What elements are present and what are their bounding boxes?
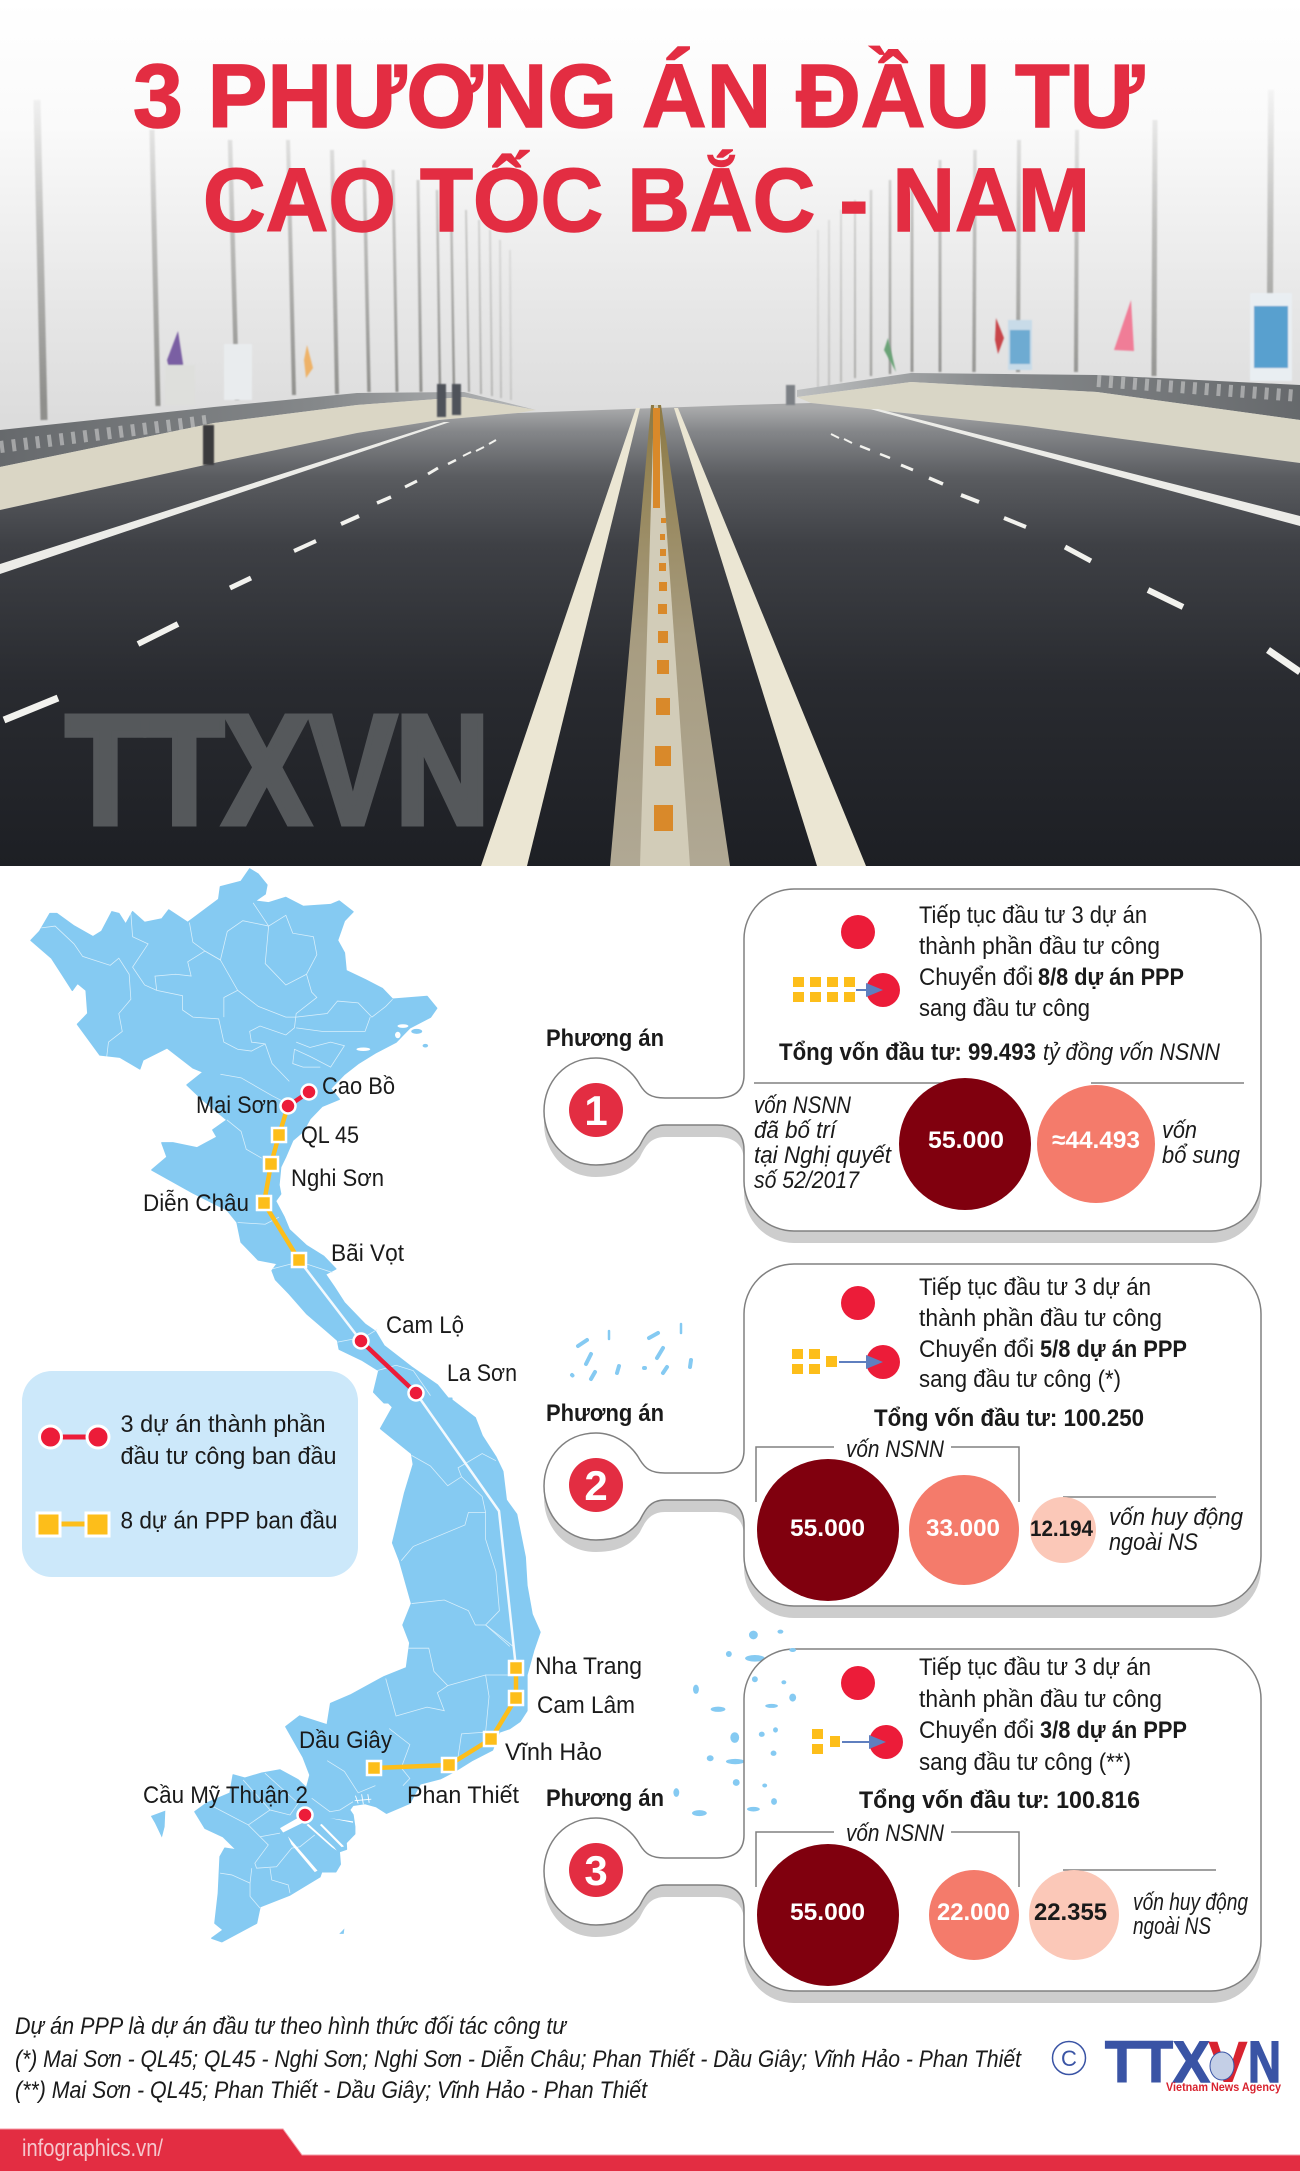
bubble: 44.493: ≈44.493 xyxy=(1052,1127,1140,1154)
map place labels: Vĩnh Hảo xyxy=(505,1739,602,1766)
note: allocated state budget: vốn NSNN xyxy=(754,1092,852,1119)
bubble: 55.000 xyxy=(757,1459,899,1601)
public investment project markers xyxy=(280,1084,424,1822)
heading: phương án 3: Phương án xyxy=(546,1785,664,1812)
bubble: 22.000: 22.000 xyxy=(937,1899,1010,1926)
logo: TTXVN: TTX xyxy=(1105,2030,1210,2095)
map place labels: Diễn Châu xyxy=(143,1190,249,1217)
footer url: infographics.vn/ xyxy=(22,2135,163,2162)
legend: PPP projects: 8 dự án PPP ban đầu xyxy=(120,1508,338,1534)
map place labels: La Sơn xyxy=(447,1360,517,1387)
footnotes xyxy=(15,2013,1022,2104)
map place labels: Cam Lộ xyxy=(386,1312,464,1339)
map place labels: Nha Trang xyxy=(535,1653,642,1680)
bubble: 22.355 xyxy=(1029,1870,1119,1960)
panel: phương án 3 xyxy=(544,1648,1261,2003)
title xyxy=(133,45,1144,251)
total investment: tỷ đồng vốn NSNN xyxy=(1043,1039,1221,1066)
panel: phương án 1 xyxy=(544,889,1261,1243)
bubble: 55.000: 55.000 xyxy=(790,1515,865,1542)
description text xyxy=(919,1274,1187,1393)
bracket: state budget xyxy=(756,1436,1019,1502)
bubble: 22.355: 22.355 xyxy=(1034,1899,1107,1926)
note: off-budget funds: vốn huy động xyxy=(1133,1889,1249,1916)
note: off-budget funds xyxy=(1133,1889,1249,1940)
icon: 5 PPP projects converted xyxy=(792,1345,900,1379)
bubble: 22.000 xyxy=(929,1870,1019,1960)
islands overlapping panel 3 xyxy=(747,1648,796,1811)
hero photo: foggy highway xyxy=(0,0,1300,866)
logo: TTXVN xyxy=(1105,2030,1281,2095)
bracket: state budget: vốn NSNN xyxy=(846,1436,945,1463)
heading: phương án 2: Phương án xyxy=(546,1400,664,1427)
islands: Hoàng Sa xyxy=(572,1324,691,1379)
note: allocated state budget xyxy=(754,1092,892,1194)
people and flags in the photo xyxy=(165,293,1292,465)
bubble: 12.194 xyxy=(1030,1497,1096,1563)
note: allocated state budget: số 52/2017 xyxy=(754,1167,860,1194)
bracket: state budget xyxy=(756,1820,1019,1887)
description text: Tiếp tục đầu tư 3 dự án xyxy=(919,902,1147,929)
copyright symbol: C xyxy=(1061,2046,1077,2071)
total investment: Tổng vốn đầu tư: 100.816 xyxy=(859,1787,1140,1814)
description text: Chuyển đổi xyxy=(919,1717,1034,1744)
note: additional funds: bổ sung xyxy=(1162,1142,1241,1169)
map place labels: Phan Thiết xyxy=(407,1782,519,1809)
description text: sang đầu tư công (**) xyxy=(919,1749,1131,1776)
map place labels: Dầu Giây xyxy=(299,1727,392,1754)
icon: 8 PPP projects converted xyxy=(793,973,900,1007)
map of Vietnam xyxy=(31,869,540,1942)
photo watermark TTXVN: TTXVN xyxy=(66,684,489,856)
copyright symbol xyxy=(1052,2042,1086,2074)
badge: number 3 xyxy=(569,1843,623,1897)
note: off-budget funds: ngoài NS xyxy=(1109,1529,1198,1556)
note: allocated state budget: đã bố trí xyxy=(754,1117,838,1144)
islands: Trường Sa xyxy=(673,1630,783,1816)
description text: 5/8 dự án PPP xyxy=(1040,1336,1187,1363)
badge: number 3: 3 xyxy=(584,1847,608,1894)
description text: 8/8 dự án PPP xyxy=(1038,964,1184,991)
description text: Chuyển đổi xyxy=(919,1336,1034,1363)
note: off-budget funds xyxy=(1109,1504,1244,1556)
bubble: 55.000 xyxy=(899,1078,1031,1210)
heading: phương án 1: Phương án xyxy=(546,1025,664,1052)
map place labels: Cầu Mỹ Thuận 2 xyxy=(143,1782,308,1809)
logo: TTXVN: Vietnam News Agency xyxy=(1166,2080,1281,2094)
bubble: 12.194: 12.194 xyxy=(1030,1516,1094,1541)
map legend xyxy=(22,1371,358,1577)
badge: number 1 xyxy=(569,1083,623,1137)
description text: Tiếp tục đầu tư 3 dự án xyxy=(919,1274,1151,1301)
note: allocated state budget: tại Nghị quyết xyxy=(754,1142,892,1169)
description text xyxy=(919,902,1184,1022)
bubble: 55.000: 55.000 xyxy=(790,1899,865,1926)
expressway route on map xyxy=(264,1092,516,1768)
total investment: Tổng vốn đầu tư: 100.250 xyxy=(874,1405,1144,1432)
bracket: state budget: vốn NSNN xyxy=(846,1820,945,1847)
bubble: 33.000: 33.000 xyxy=(926,1515,1000,1542)
description text: sang đầu tư công xyxy=(919,995,1090,1022)
icon: 3 public projects xyxy=(841,915,875,949)
total investment: Tổng vốn đầu tư: 99.493 xyxy=(779,1039,1036,1066)
logo: TTXVN: N xyxy=(1248,2030,1281,2095)
note: additional funds xyxy=(1162,1117,1241,1169)
description text: thành phần đầu tư công xyxy=(919,1305,1162,1332)
description text xyxy=(919,1654,1187,1776)
total investment xyxy=(779,1039,1221,1066)
bubble: 33.000 xyxy=(909,1475,1019,1585)
description text: sang đầu tư công (*) xyxy=(919,1366,1121,1393)
bubble: 44.493 xyxy=(1037,1085,1155,1203)
note: additional funds: vốn xyxy=(1162,1117,1197,1144)
map place labels: QL 45 xyxy=(301,1122,359,1149)
bubble: 55.000: 55.000 xyxy=(928,1127,1004,1154)
map place labels: Cao Bồ xyxy=(322,1073,395,1100)
footnotes: (**) Mai Sơn - QL45; Phan Thiết - Dầu Giây; Vĩnh Hảo - Phan Thiết xyxy=(15,2077,648,2104)
bubble: 55.000 xyxy=(757,1844,899,1986)
description text: Tiếp tục đầu tư 3 dự án xyxy=(919,1654,1151,1681)
note: off-budget funds: vốn huy động xyxy=(1109,1504,1244,1531)
badge: number 2: 2 xyxy=(584,1462,608,1509)
legend: public investment projects xyxy=(40,1411,336,1470)
icon: 3 PPP projects converted xyxy=(812,1725,903,1759)
map place labels: Nghi Sơn xyxy=(291,1165,384,1192)
map place labels: Bãi Vọt xyxy=(331,1240,404,1267)
map place labels: Mai Sơn xyxy=(196,1092,278,1119)
footnotes: Dự án PPP là dự án đầu tư theo hình thức đối tác công tư xyxy=(15,2013,568,2040)
logo: TTXVN: V xyxy=(1208,2030,1248,2095)
title: 3 PHƯƠNG ÁN ĐẦU TƯ xyxy=(133,45,1144,147)
description text: thành phần đầu tư công xyxy=(919,1686,1162,1713)
legend: PPP projects xyxy=(37,1508,338,1536)
map place labels xyxy=(143,1073,642,1809)
footnotes: (*) Mai Sơn - QL45; QL45 - Nghi Sơn; Nghi Sơn - Diễn Châu; Phan Thiết - Dầu Giây; Vĩnh Hảo - Phan Thiết xyxy=(15,2045,1022,2073)
title: CAO TỐC BẮC - NAM xyxy=(203,149,1090,251)
map place labels: Cam Lâm xyxy=(537,1692,635,1719)
badge: number 1: 1 xyxy=(584,1087,608,1134)
badge: number 2 xyxy=(569,1458,623,1512)
legend: public investment projects: đầu tư công ban đầu xyxy=(120,1443,336,1470)
note: off-budget funds: ngoài NS xyxy=(1133,1913,1211,1940)
icon: 3 public projects xyxy=(841,1666,875,1700)
footer bar xyxy=(0,2129,1300,2171)
legend: public investment projects: 3 dự án thành phần xyxy=(120,1411,326,1438)
description text: thành phần đầu tư công xyxy=(919,933,1160,960)
PPP project markers xyxy=(257,1128,523,1775)
description text: 3/8 dự án PPP xyxy=(1040,1717,1187,1744)
description text: Chuyển đổi xyxy=(919,964,1033,991)
panel: phương án 2 xyxy=(544,1264,1261,1618)
icon: 3 public projects xyxy=(841,1286,875,1320)
